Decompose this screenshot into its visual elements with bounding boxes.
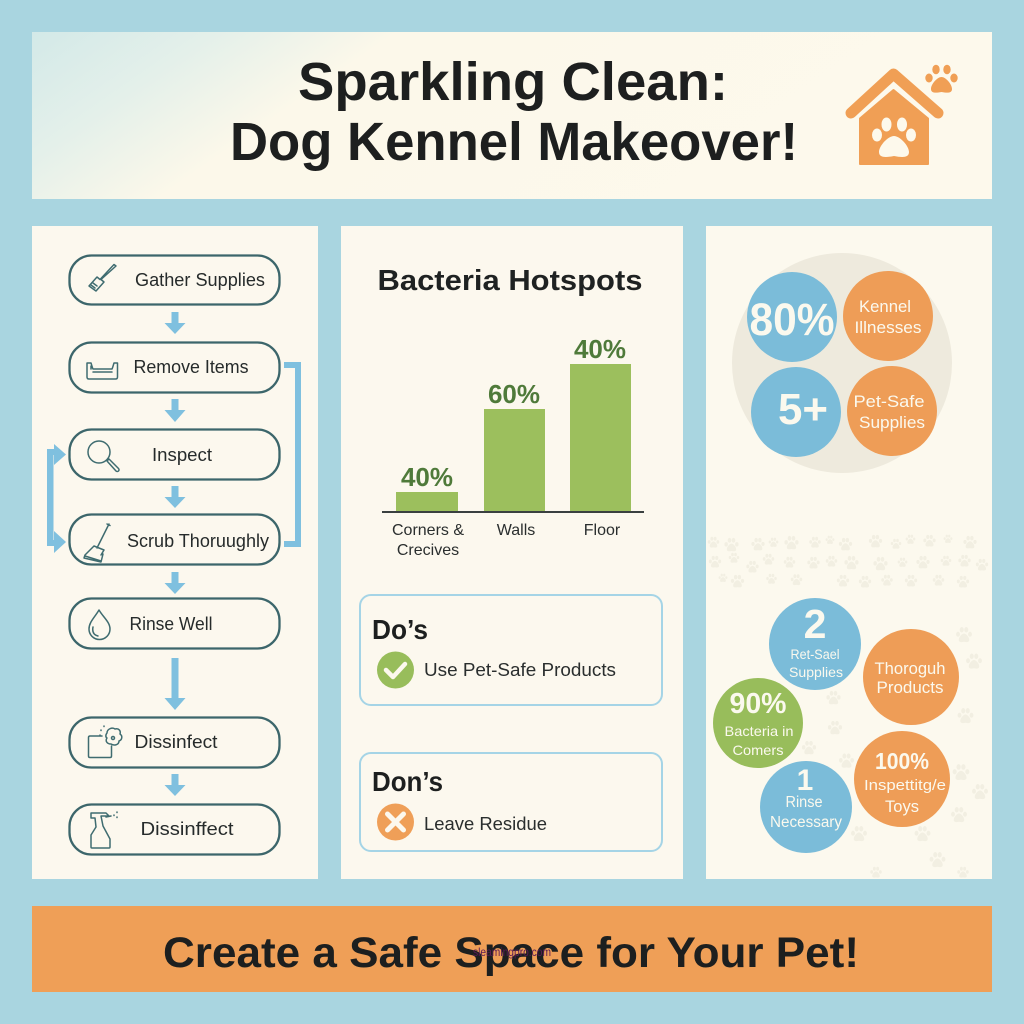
circle cluster: bottom bbox=[713, 598, 959, 853]
watermark text: sleamingpro.com bbox=[473, 945, 551, 959]
header banner bbox=[32, 32, 992, 199]
step: gather supplies bbox=[70, 256, 280, 304]
stat: 1: Rinse bbox=[786, 794, 822, 811]
title bbox=[230, 52, 798, 172]
stat: pet-safe supplies: Supplies bbox=[859, 413, 925, 432]
step: inspect bbox=[70, 430, 280, 480]
icon: check bbox=[377, 652, 414, 688]
stat: kennel illnesses: Illnesses bbox=[854, 318, 922, 337]
bar chart: 40% bbox=[401, 462, 453, 492]
footer banner: Create a Safe Space for Your Pet! bbox=[163, 929, 859, 977]
arrow bbox=[164, 312, 186, 334]
circle cluster: top bbox=[732, 253, 952, 473]
arrow bbox=[164, 399, 186, 422]
stat: thorough products: Products bbox=[876, 678, 944, 697]
stat: 2 bbox=[769, 598, 861, 690]
stat: 90% bbox=[713, 678, 803, 768]
callout: do's: Do’s bbox=[372, 614, 428, 645]
stat: pet-safe supplies bbox=[847, 366, 937, 456]
stat: 100%: Inspettitg/e bbox=[864, 778, 946, 794]
callout: don's: Don’s bbox=[372, 766, 443, 797]
step: scrub thoroughly: Scrub Thoruughly bbox=[127, 531, 269, 551]
stat: 2: 2 bbox=[804, 601, 826, 647]
arrow: right loop bracket bbox=[284, 365, 298, 544]
step: scrub thoroughly bbox=[70, 514, 280, 564]
stat: 5+: 5+ bbox=[778, 385, 828, 434]
arrow bbox=[164, 658, 186, 710]
bar chart: Walls bbox=[497, 522, 535, 539]
callout: do's: Use Pet-Safe Products bbox=[424, 659, 616, 680]
stat: 1: 1 bbox=[797, 764, 813, 797]
callout: don's: Leave Residue bbox=[424, 813, 547, 834]
bar chart: Floor bbox=[584, 522, 621, 539]
stat: 80%: 80% bbox=[750, 294, 834, 345]
stat: 80% bbox=[747, 272, 837, 362]
stat: 90%: Comers bbox=[732, 742, 784, 758]
step: gather supplies: Gather Supplies bbox=[135, 270, 265, 290]
heading: Bacteria Hotspots bbox=[378, 265, 642, 297]
stat: 90%: Bacteria in bbox=[724, 723, 794, 739]
step: remove items: Remove Items bbox=[134, 357, 248, 377]
arrow bbox=[164, 486, 186, 508]
arrow: left loop double arrow bbox=[47, 444, 66, 553]
stat: pet-safe supplies: Pet-Safe bbox=[854, 392, 924, 411]
stat: thorough products: Thoroguh bbox=[874, 659, 946, 678]
stat: 5+ bbox=[751, 367, 841, 457]
stat: 100%: Toys bbox=[885, 798, 919, 816]
bar chart: Corners & bbox=[392, 522, 464, 539]
step: disinfect spray bbox=[70, 804, 280, 854]
callout: do's bbox=[360, 595, 662, 705]
stat: 1 bbox=[760, 761, 852, 853]
icon: cross bbox=[377, 804, 414, 840]
paw watermark band bbox=[708, 535, 988, 878]
icon: dog house with paws bbox=[851, 65, 958, 164]
stat: 100%: 100% bbox=[875, 748, 929, 774]
stat: thorough products bbox=[863, 629, 959, 725]
step: disinfect bbox=[70, 718, 280, 768]
step: remove items bbox=[70, 342, 280, 392]
panel: process steps bbox=[32, 226, 318, 879]
stat: 90%: 90% bbox=[730, 688, 787, 720]
stat: 1: Necessary bbox=[770, 814, 842, 831]
callout: don's bbox=[360, 753, 662, 851]
bar chart: Crecives bbox=[397, 542, 459, 559]
panel: bacteria hotspots bbox=[341, 226, 683, 879]
title: Dog Kennel Makeover! bbox=[230, 112, 798, 172]
arrow bbox=[164, 572, 186, 594]
stat: 2: Supplies bbox=[789, 664, 843, 680]
step: rinse well: Rinse Well bbox=[130, 614, 212, 634]
bar chart: 60% bbox=[488, 379, 540, 409]
step: rinse well bbox=[70, 598, 280, 648]
bar chart: 40% bbox=[574, 334, 626, 364]
step: disinfect: Dissinfect bbox=[134, 732, 218, 752]
stat: 100% bbox=[854, 731, 950, 827]
panel: statistics bbox=[706, 226, 992, 879]
arrow bbox=[164, 774, 186, 796]
bar chart bbox=[382, 334, 644, 559]
stat: kennel illnesses: Kennel bbox=[859, 297, 911, 316]
footer banner bbox=[32, 906, 992, 992]
stat: 2: Ret-Sael bbox=[790, 647, 840, 662]
step: disinfect spray: Dissinffect bbox=[140, 819, 234, 839]
title: Sparkling Clean: bbox=[298, 52, 728, 112]
step: inspect: Inspect bbox=[152, 445, 212, 465]
stat: kennel illnesses bbox=[843, 271, 933, 361]
